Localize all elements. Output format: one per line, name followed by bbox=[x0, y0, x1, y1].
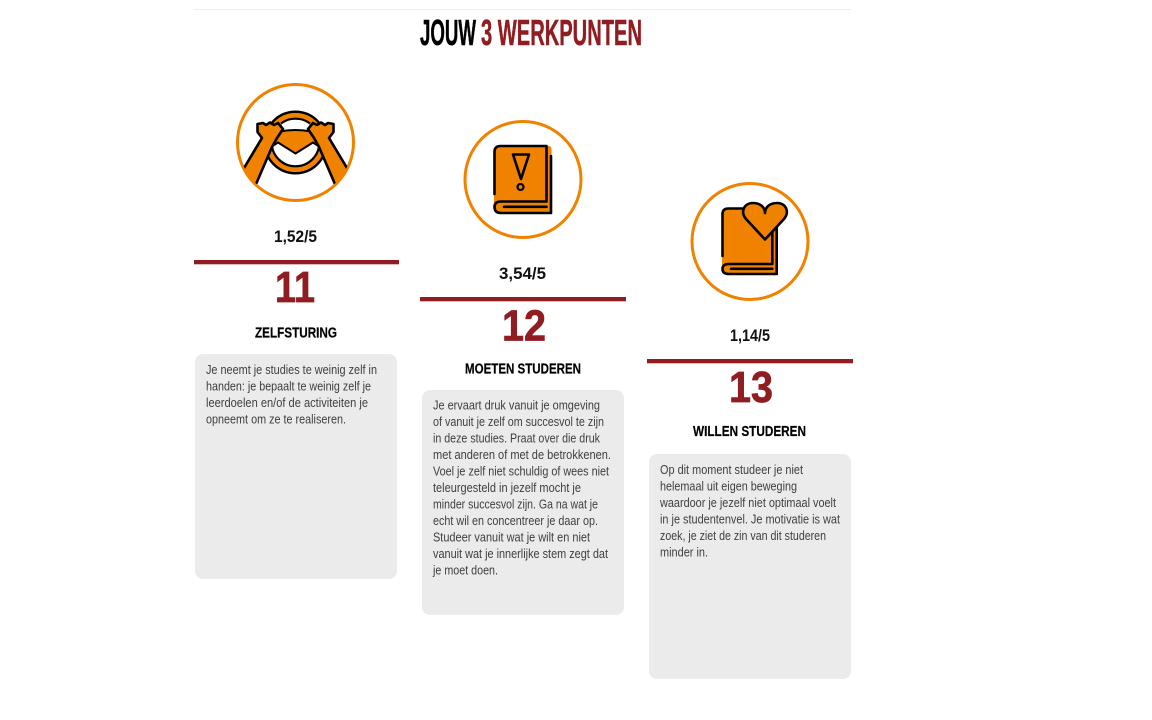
score: 1,14/5 bbox=[730, 326, 770, 345]
text box: Je ervaart druk vanuit je omgeving bbox=[433, 398, 600, 412]
heading: ZELFSTURING bbox=[255, 326, 337, 342]
heading: WILLEN STUDEREN bbox=[693, 424, 806, 440]
icon: book with exclamation mark bbox=[465, 122, 581, 238]
text box: leerdoelen en/of de activiteiten je bbox=[206, 395, 368, 410]
text box: in deze studies. Praat over die druk bbox=[433, 430, 600, 446]
panel: moeten studeren bbox=[420, 122, 626, 615]
text box: Op dit moment studeer je niet bbox=[660, 462, 803, 477]
title: 3 WERKPUNTEN bbox=[481, 12, 642, 53]
title: JOUW bbox=[420, 12, 476, 53]
text box bbox=[649, 454, 851, 679]
text box bbox=[195, 354, 397, 579]
text box: of vanuit je zelf om succesvol te zijn bbox=[433, 414, 604, 429]
panel: zelfsturing bbox=[194, 84, 399, 579]
text box: helemaal uit eigen beweging bbox=[660, 478, 797, 494]
text box bbox=[422, 390, 624, 615]
title bbox=[420, 12, 642, 53]
text box: met anderen of met de betrokkenen. bbox=[433, 447, 611, 462]
text box: vanuit wat je innerlijke stem zegt dat bbox=[433, 546, 608, 561]
panel: willen studeren bbox=[647, 184, 853, 679]
number: 12 bbox=[502, 302, 546, 350]
text box: minder succesvol zijn. Ga na wat je bbox=[433, 496, 598, 512]
score: 3,54/5 bbox=[499, 264, 546, 283]
icon: book with heart bbox=[692, 184, 808, 300]
number: 11 bbox=[275, 264, 315, 312]
number: 13 bbox=[729, 364, 773, 412]
text box: teleurgesteld in jezelf mocht je bbox=[433, 480, 581, 495]
text box: zoek, je ziet de zin van dit studeren bbox=[660, 528, 826, 543]
text box: minder in. bbox=[660, 544, 708, 560]
text box: handen: je bepaalt te weinig zelf je bbox=[206, 378, 371, 394]
text box: Studeer vanuit wat je wilt en niet bbox=[433, 530, 590, 544]
icon: hands on steering wheel bbox=[238, 84, 354, 200]
text box: in je studentenvel. Je motivatie is wat bbox=[660, 512, 840, 526]
text box: echt wil en concentreer je daar op. bbox=[433, 513, 598, 528]
text box: opneemt om ze te realiseren. bbox=[206, 412, 346, 426]
score: 1,52/5 bbox=[274, 227, 317, 246]
text box: je moet doen. bbox=[432, 562, 498, 578]
text box: Voel je zelf niet schuldig of wees niet bbox=[433, 464, 609, 478]
text box: waardoor je jezelf niet optimaal voelt bbox=[659, 495, 836, 510]
heading: MOETEN STUDEREN bbox=[465, 362, 581, 378]
text box: Je neemt je studies te weinig zelf in bbox=[206, 362, 377, 377]
